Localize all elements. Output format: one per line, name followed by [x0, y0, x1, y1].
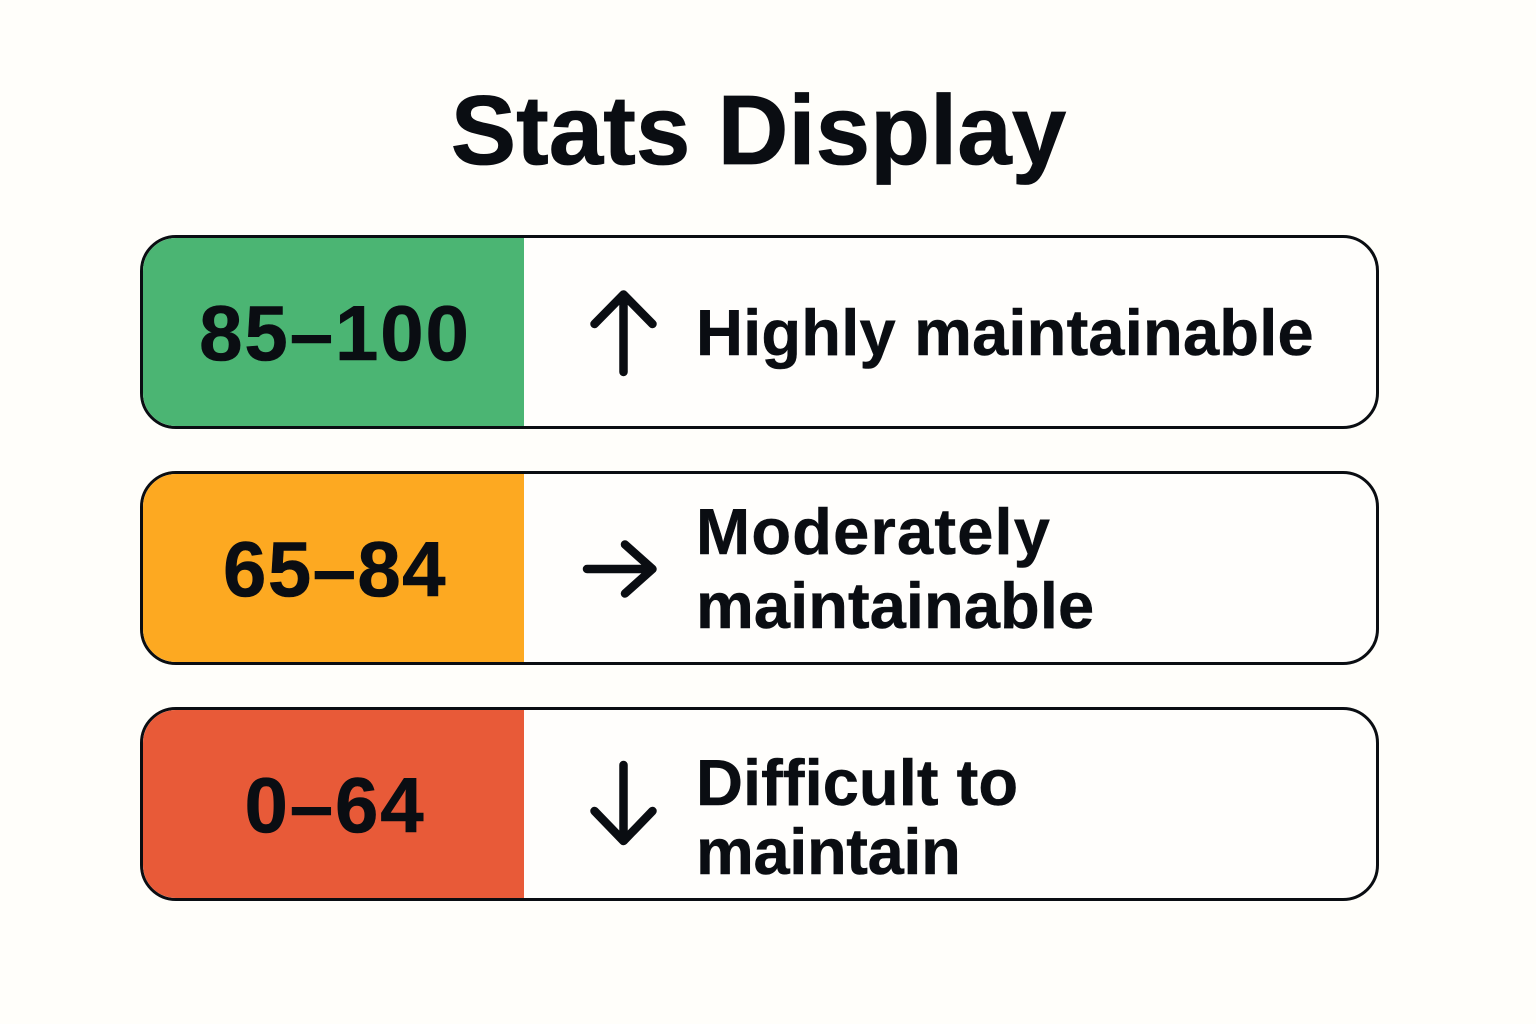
score range: 65-84: 65–84 — [223, 525, 447, 613]
icon: up arrow — [590, 290, 657, 376]
icon: down arrow — [590, 760, 657, 846]
score range: 85-100 — [143, 238, 524, 426]
label: highly maintainable: Highly maintainable — [696, 296, 1314, 369]
label: moderately maintainable: Moderately — [696, 495, 1051, 568]
label: difficult to maintain — [696, 746, 1018, 888]
panel: difficult to maintain — [140, 707, 1379, 901]
icon: right arrow — [582, 540, 657, 598]
title: Stats Display — [451, 75, 1066, 185]
label: moderately maintainable — [696, 495, 1094, 642]
score range: 0-64 — [143, 710, 524, 898]
panel: moderately maintainable — [140, 471, 1379, 665]
label: difficult to maintain: Difficult to — [696, 746, 1018, 819]
label: moderately maintainable: maintainable — [696, 569, 1094, 642]
score range: 85-100: 85–100 — [199, 289, 471, 377]
label: difficult to maintain: maintain — [696, 815, 960, 888]
panel: highly maintainable — [140, 235, 1379, 429]
score range: 65-84 — [143, 474, 524, 662]
score range: 0-64: 0–64 — [244, 761, 426, 849]
